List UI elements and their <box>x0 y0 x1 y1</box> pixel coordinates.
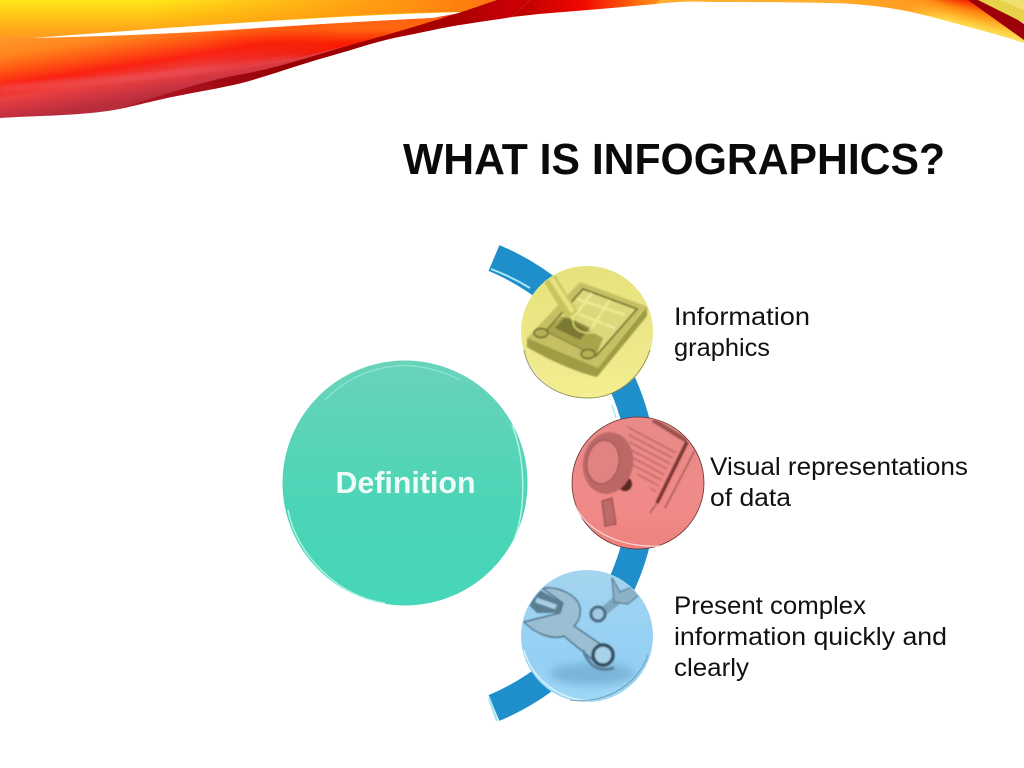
ribbon banner <box>0 0 1024 118</box>
blue item text: Present complex <box>674 592 867 620</box>
yellow item text: Information <box>674 303 810 331</box>
curved blue arc <box>489 258 644 721</box>
yellow item text: graphics <box>674 334 770 362</box>
definition label: Definition <box>336 465 476 500</box>
blue circle with wrenches icon <box>521 570 653 702</box>
red item text: Visual representations <box>710 453 968 481</box>
definition circle <box>282 360 528 606</box>
red item text: of data <box>710 484 791 512</box>
blue item text: clearly <box>674 654 750 682</box>
blue item text: information quickly and <box>674 623 947 651</box>
yellow circle with tablet icon <box>521 266 653 398</box>
title: WHAT IS INFOGRAPHICS? <box>403 135 945 184</box>
red circle with magnifier and document icon <box>572 417 704 549</box>
